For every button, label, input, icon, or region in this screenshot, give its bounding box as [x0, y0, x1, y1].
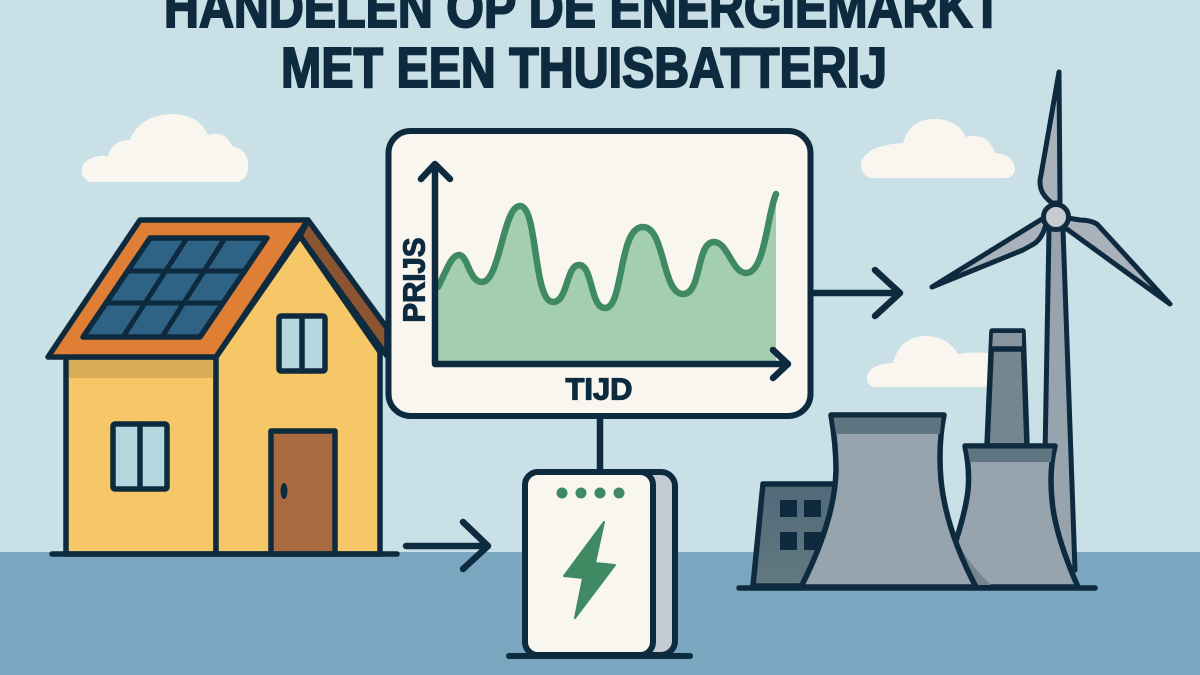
house: orange roof: [48, 220, 308, 357]
panel: price chart: [388, 131, 810, 416]
plant: ground line: [739, 585, 1095, 591]
battery: front casing: [525, 472, 653, 655]
cloud: lower right: [867, 336, 996, 387]
house: ground line: [52, 551, 397, 557]
cloud: upper right: [861, 119, 1015, 178]
battery: back casing: [630, 472, 675, 655]
battery: ground line: [509, 653, 690, 659]
x axis label: TIJD: [566, 372, 632, 406]
y axis label: PRIJS: [396, 238, 432, 322]
house with solar panels: [48, 220, 397, 554]
house: left wall: [66, 357, 216, 554]
power plant: [739, 331, 1095, 588]
turbine: tower: [1043, 229, 1075, 570]
title: MET EEN THUISBATTERIJ: [281, 36, 887, 100]
plant: chimney: [987, 331, 1027, 446]
house: upper window: [279, 316, 325, 371]
house: door: [271, 431, 335, 554]
house: gable side wall: [216, 236, 380, 554]
house: wall shadow band: [69, 360, 214, 378]
battery: [509, 472, 690, 656]
turbine: right blade: [1064, 218, 1170, 304]
turbine: left blade: [932, 219, 1046, 287]
plant: building: [753, 484, 845, 586]
icon: lightning bolt: [564, 522, 615, 618]
turbine: hub: [1044, 204, 1068, 230]
chart: price line: [438, 194, 776, 308]
chart: green area: [438, 194, 776, 361]
house: lower window: [113, 424, 167, 489]
wind turbine: [932, 72, 1170, 570]
chart: axes: [421, 164, 788, 378]
ground band: [0, 552, 1200, 675]
battery: status dots: [556, 488, 624, 498]
arrow: chart to energy market: [813, 270, 900, 316]
plant: large cooling tower: [801, 415, 976, 587]
arrow: house to battery: [406, 522, 488, 569]
house: brown roof edge: [300, 220, 387, 356]
icon: solar panel: [83, 238, 267, 337]
title: [164, 0, 1002, 100]
plant: small cooling tower: [940, 446, 1078, 587]
connector: chart to battery: [597, 414, 603, 472]
cloud: left: [82, 114, 248, 182]
turbine: top blade: [1040, 72, 1060, 203]
